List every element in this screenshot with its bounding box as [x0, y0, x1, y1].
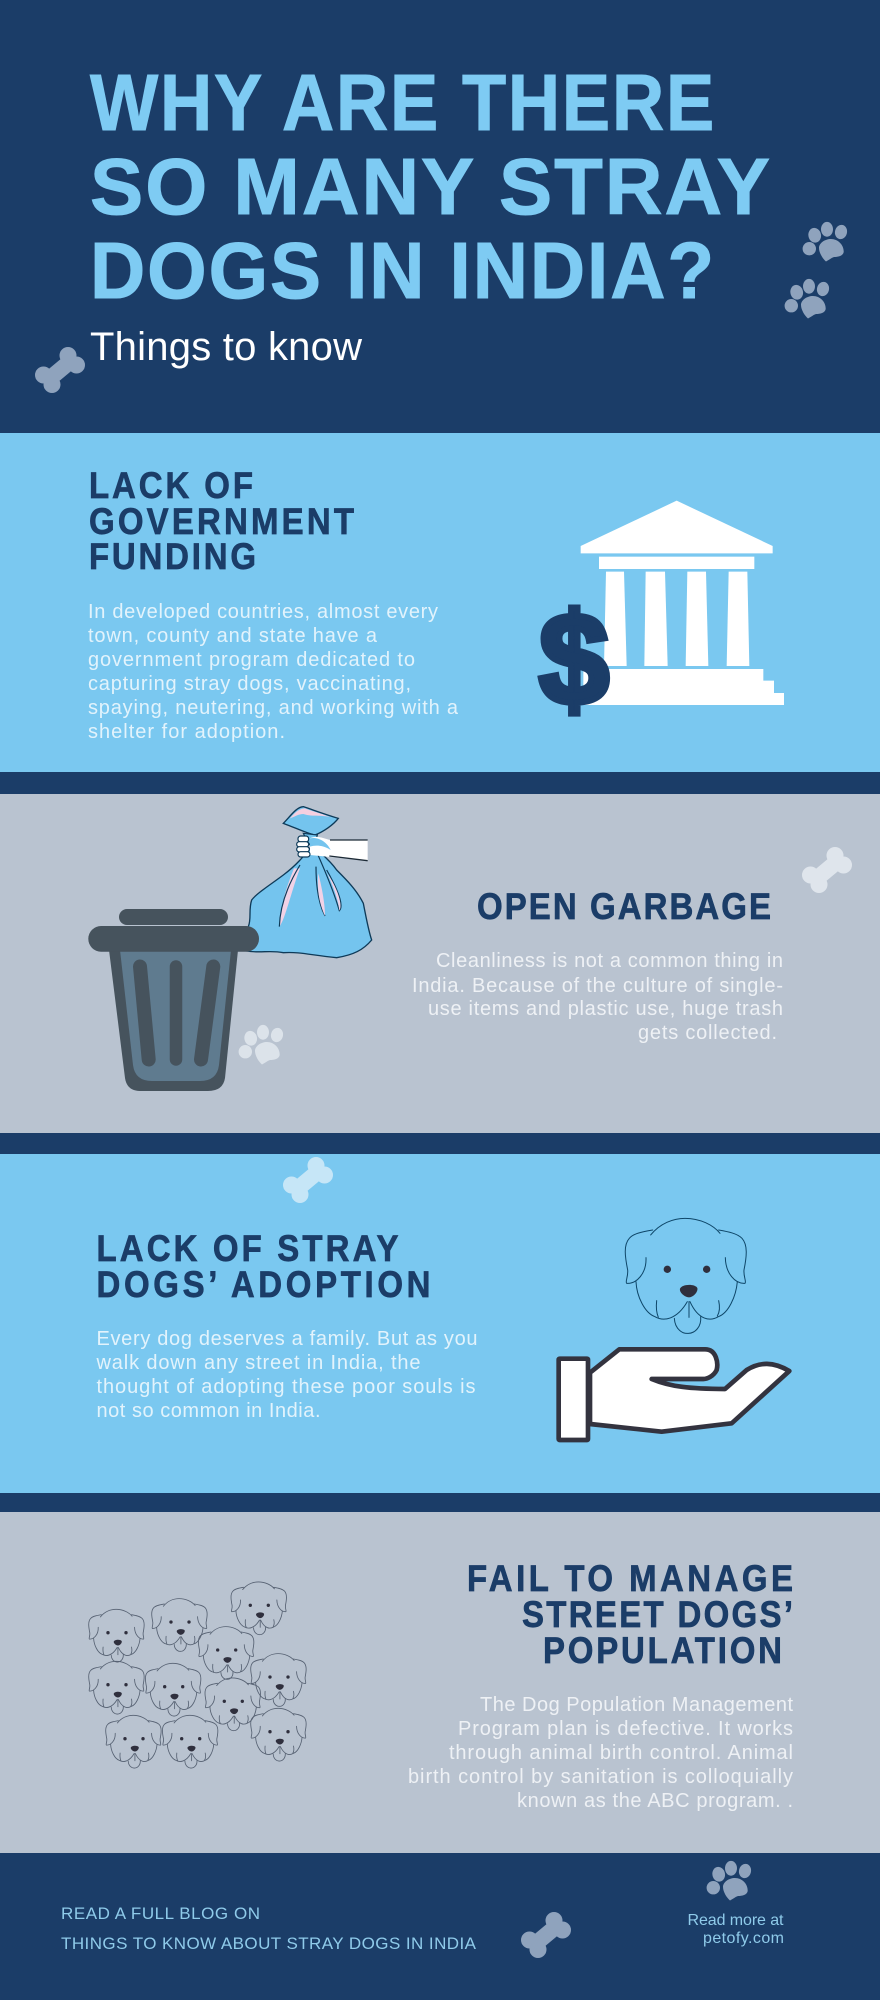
panel: fail to manage population: [0, 1512, 880, 1853]
panel: lack of stray dogs adoption: [0, 1154, 880, 1493]
icon: bone at top: [284, 1158, 332, 1202]
text block: population: birth control by sanitation is colloquially: [408, 1766, 793, 1788]
heading: adoption: [96, 1228, 430, 1305]
title: [90, 58, 772, 315]
icon: bone: [36, 348, 84, 392]
heading: lack of government funding: FUNDING: [89, 536, 256, 577]
text block: read more: Read more at: [688, 1912, 784, 1929]
text block: funding: spaying, neutering, and working with a: [88, 697, 459, 719]
icon: government building with dollar sign: [539, 501, 784, 732]
heading: lack of government funding: GOVERNMENT: [89, 501, 355, 542]
title: WHY ARE THERE: [90, 58, 716, 147]
text block: population: [408, 1694, 793, 1812]
title: DOGS IN INDIA?: [90, 226, 716, 315]
heading: lack of government funding: [89, 465, 355, 577]
panel: header: [0, 0, 880, 433]
icon: paw near trash can: [239, 1025, 285, 1064]
text block: read more: petofy.com: [703, 1930, 784, 1947]
heading: adoption: LACK OF STRAY: [96, 1228, 398, 1269]
heading: lack of government funding: LACK OF: [89, 465, 253, 506]
text block: funding: town, county and state have a: [88, 625, 378, 647]
icon: dog face above hand: [625, 1218, 746, 1333]
text block: funding: [88, 601, 459, 743]
text block: garbage: India. Because of the culture of single-: [412, 975, 783, 997]
text block: adoption: walk down any street in India, the: [96, 1352, 420, 1374]
text block: garbage: gets collected.: [638, 1022, 777, 1044]
text block: blog link: THINGS TO KNOW ABOUT STRAY DOGS IN INDIA: [61, 1934, 477, 1953]
heading: population: FAIL TO MANAGE: [467, 1558, 793, 1599]
panel: open garbage: [0, 794, 880, 1133]
icon: footer bone: [522, 1912, 570, 1958]
icon: group of dogs: [89, 1582, 306, 1768]
heading: population: POPULATION: [543, 1630, 782, 1671]
text block: population: Program plan is defective. It works: [458, 1718, 793, 1740]
divider band three: [0, 1493, 880, 1512]
text block: adoption: [96, 1328, 478, 1422]
icon: open hand: [559, 1349, 789, 1440]
heading: open garbage: OPEN GARBAGE: [477, 886, 771, 927]
text block: population: The Dog Population Management: [480, 1694, 793, 1716]
text block: adoption: thought of adopting these poor souls is: [96, 1376, 476, 1398]
icon: dollar sign: $: [539, 586, 609, 732]
text block: garbage: use items and plastic use, huge trash: [428, 998, 783, 1020]
text block: funding: capturing stray dogs, vaccinating,: [88, 673, 411, 695]
panel: footer: [0, 1853, 880, 2000]
heading: population: [467, 1558, 793, 1671]
text block: read more: [688, 1912, 784, 1947]
text block: funding: government program dedicated to: [88, 649, 415, 671]
text block: adoption: not so common in India.: [96, 1400, 320, 1422]
text block: blog link: [61, 1904, 477, 1953]
icon: paw top right: [803, 222, 849, 262]
text block: blog link: READ A FULL BLOG ON: [61, 1904, 260, 1923]
panel: lack of government funding: [0, 433, 880, 772]
text block: funding: shelter for adoption.: [88, 721, 285, 743]
text block: population: through animal birth control. Animal: [449, 1742, 793, 1764]
icon: bone top right: [802, 848, 852, 892]
text block: funding: In developed countries, almost every: [88, 601, 438, 623]
title: SO MANY STRAY: [90, 142, 772, 231]
heading: population: STREET DOGS’: [522, 1594, 793, 1635]
subtitle: Things to know: [90, 325, 362, 369]
icon: trash can: [88, 909, 259, 1091]
text block: adoption: Every dog deserves a family. But as you: [96, 1328, 478, 1350]
text block: population: known as the ABC program. .: [517, 1790, 793, 1812]
text block: garbage: [412, 950, 783, 1044]
divider band two: [0, 1133, 880, 1154]
divider band one: [0, 772, 880, 794]
text block: garbage: Cleanliness is not a common thing in: [436, 950, 783, 972]
icon: trash bag in hand: [247, 807, 372, 958]
icon: footer paw: [707, 1861, 753, 1900]
heading: adoption: DOGS’ ADOPTION: [96, 1264, 430, 1305]
icon: paw lower right: [785, 279, 831, 318]
